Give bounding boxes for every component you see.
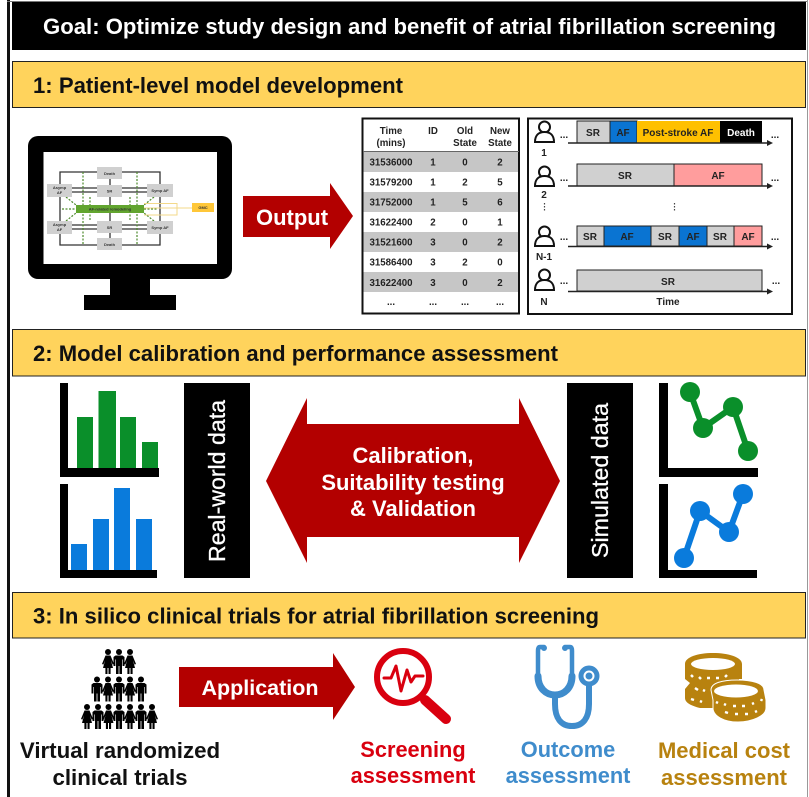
timeline: patient 1: AF [616,128,630,139]
table: state transitions: New [490,126,510,137]
label: real-world data [184,383,250,578]
arrow: calibration, suitability testing and validation: & Validation [350,496,476,521]
title: Goal: Optimize study design and benefit of atrial fibrillation screening [43,14,776,39]
table: state transitions: ... [496,297,504,308]
table: state transitions: 0 [462,278,468,289]
heading: section 2: 2: Model calibration and performance assessment [33,341,559,366]
table: state transitions: 3 [430,278,436,289]
timeline: patient 1: Death [727,128,755,139]
heading: section 3: 3: In silico clinical trials for atrial fibrillation screening [33,604,599,628]
table: state transitions: 31586400 [369,258,413,268]
timeline: patient N-1: ... [560,232,568,243]
table: state transitions: State [488,138,512,149]
label: simulated data: Simulated data [587,403,613,558]
label: outcome assessment: assessment [506,763,630,788]
label: screening assessment [351,737,475,788]
label: medical cost assessment: assessment [661,765,788,790]
label: outcome assessment: Outcome [521,737,615,762]
table: state transitions: 2 [430,218,436,228]
table: state transitions: State [453,138,477,149]
table: state transitions: 1 [430,158,436,168]
model state diagram: Symp AF [151,188,169,193]
panel: patient state timelines [528,118,792,314]
heading: section 3 [12,592,806,638]
table: state transitions: 0 [462,158,468,168]
label: virtual randomized clinical trials: Virtual randomized [20,738,220,763]
timeline: patient 1: ... [560,130,568,141]
timeline: patient 2: 2 [541,190,547,201]
timeline: patient N-1: SR [583,232,598,243]
label: virtual randomized clinical trials: clinical trials [52,765,188,790]
timeline: patient 1: SR [586,128,601,139]
arrow: calibration, suitability testing and validation [266,398,560,563]
label: outcome assessment [506,737,630,788]
timeline: patient N [535,270,780,308]
line chart: green [659,382,758,477]
timeline: patient 1 [535,121,779,159]
icon: group of people [81,649,158,729]
table: state transitions: 0 [462,238,468,248]
bar chart: green [60,383,159,477]
label: screening assessment: assessment [351,763,475,788]
timeline: patient 2: ... [771,173,779,184]
arrow: calibration, suitability testing and validation: Calibration, [352,443,474,468]
table: state transitions: 2 [497,278,503,289]
table: state transitions: ... [461,297,469,308]
table: state transitions: ID [428,126,438,137]
timeline: patient N-1: SR [713,232,728,243]
label: medical cost assessment [658,738,791,790]
table: state transitions: 5 [462,198,468,208]
label: simulated data [567,383,633,578]
model state diagram: AF [57,227,63,232]
table: state transitions: 3 [430,238,436,248]
model state diagram: Death [104,242,116,247]
label: real-world data: Real-world data [204,400,230,562]
label: screening assessment: Screening [360,737,466,762]
table: state transitions: ... [387,297,395,308]
table: state transitions: 2 [462,258,468,268]
model state diagram: AF [57,190,63,195]
timeline: patient 2: ... [560,173,568,184]
timeline: patient N-1 [535,226,779,263]
arrow: application: Application [201,676,319,700]
ellipsis markers [544,203,674,211]
icon: computer monitor with model diagram [28,136,232,310]
model state diagram: Symp AF [151,225,169,230]
arrow: application [179,653,355,720]
icon: coins [685,653,766,722]
table: state transitions: 31579200 [369,178,413,188]
table: state transitions: 5 [497,178,503,188]
timeline: patient N-1: ... [771,232,779,243]
table: state transitions: 1 [430,178,436,188]
table: state transitions: 0 [462,218,468,228]
table: state transitions: 2 [462,178,468,188]
table: state transitions: 1 [497,218,503,228]
table: state transitions: 6 [497,198,503,208]
heading: section 2 [12,330,806,376]
model state diagram: SR [107,225,112,230]
label: virtual randomized clinical trials [20,738,220,790]
model state diagram: SR [107,188,112,194]
table: state transitions: Old [457,126,473,137]
table: state transitions: 31521600 [369,238,413,248]
model state diagram: AF-related remodeling [89,206,132,212]
table: state transitions: 1 [430,198,436,208]
arrow: output [243,183,353,249]
timeline: patient N: N [540,297,548,308]
timeline: patient 2 [535,164,779,201]
table: state transitions: 2 [497,158,503,168]
timeline: patient N-1: AF [620,232,634,243]
timeline: patient 1: ... [771,130,779,141]
model state diagram [47,167,214,250]
title [12,2,806,50]
table: state transitions: 31622400 [369,278,413,289]
label: medical cost assessment: Medical cost [658,738,791,763]
timeline: patient N: SR [661,277,676,288]
timeline: patient 1: 1 [541,148,547,159]
arrow: calibration, suitability testing and validation: Suitability testing [321,470,505,495]
timeline: patient N: ... [772,276,780,287]
line chart: blue [659,484,757,578]
model state diagram: Asymp [53,222,67,227]
timeline: patient N: Time [656,297,680,308]
table: state transitions: Time [380,126,403,137]
table: state transitions: 3 [430,258,436,268]
table: state transitions: 2 [497,238,503,248]
model state diagram: Asymp [53,185,67,190]
timeline: patient N-1: N-1 [536,252,552,263]
timeline: patient N-1: AF [686,232,700,243]
bar chart: blue [60,484,157,578]
heading: section 1 [12,62,806,108]
table: state transitions: 31752000 [369,198,413,208]
timeline: patient N-1: SR [658,232,673,243]
timeline: patient N-1: AF [741,232,755,243]
table: state transitions: (mins) [376,138,406,149]
table: state transitions: 31536000 [369,158,413,168]
timeline: patient 2: AF [711,171,725,182]
timeline: patient 1: Post-stroke AF [643,128,713,139]
table: state transitions: 31622400 [369,218,413,228]
icon: magnifier with pulse [377,651,446,719]
icon: stethoscope [538,646,597,726]
table: state transitions: 0 [497,258,503,268]
table: state transitions [362,118,519,314]
arrow: output: Output [256,205,329,230]
timeline: patient N: ... [560,276,568,287]
model state diagram: GMC [198,205,208,210]
table: state transitions: ... [429,297,437,308]
timeline: patient 2: SR [618,171,633,182]
heading: section 1: 1: Patient-level model development [33,73,404,98]
model state diagram: Death [104,171,116,176]
